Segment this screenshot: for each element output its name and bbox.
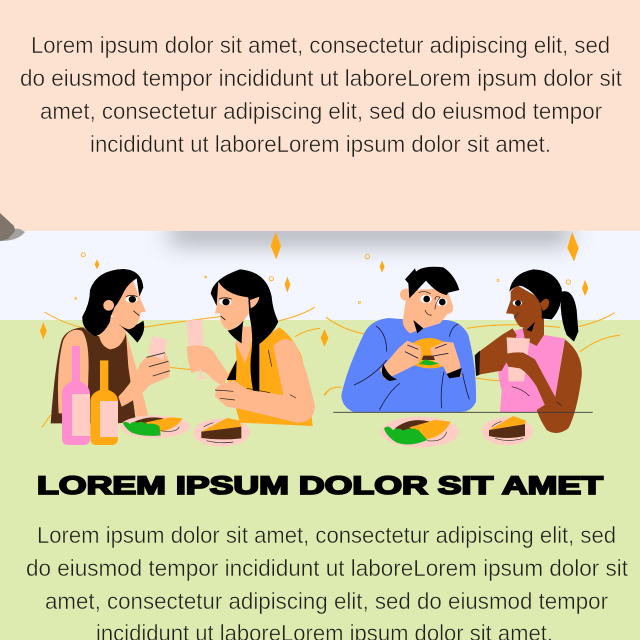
decorative sparkles and lines [321,232,620,395]
text block: bottom paragraph: amet, consectetur adipiscing elit, sed do eiusmod tempor [45,588,608,614]
text block: top paragraph: Lorem ipsum dolor sit amet, consectetur adipiscing elit, sed [31,32,610,58]
panel: top text background [0,0,640,231]
text block: bottom paragraph: do eiusmod tempor incididunt ut laboreLorem ipsum dolor sit [26,555,628,581]
illustration: man and woman at table [321,232,620,447]
plate: cake [193,418,250,447]
woman 1: brown top [51,269,170,423]
text block: bottom paragraph: Lorem ipsum dolor sit amet, consectetur adipiscing elit, sed [37,522,616,548]
text block: bottom paragraph [26,522,628,640]
background floor [0,320,640,640]
decorative sparkles and lines [40,232,330,427]
plate: salad [381,417,459,447]
illustration: two women at table [40,232,330,447]
woman 2: yellow top [186,269,315,426]
table line [333,411,593,414]
heading: LOREM IPSUM DOLOR SIT AMET [37,472,603,500]
text block: top paragraph [20,32,622,157]
bottles [62,346,118,445]
background wall [0,225,640,321]
woman 3: pink top [475,269,582,433]
text block: top paragraph: do eiusmod tempor incididunt ut laboreLorem ipsum dolor sit [20,65,622,91]
man: blue sweater [341,267,476,412]
plate: cake [482,416,533,445]
plate: salad [120,415,190,438]
icon: corner rock [0,213,25,241]
text block: top paragraph: amet, consectetur adipiscing elit, sed do eiusmod tempor [40,98,602,124]
text block: top paragraph: incididunt ut laboreLorem ipsum dolor sit amet. [90,131,551,157]
panel shadow [170,222,570,244]
